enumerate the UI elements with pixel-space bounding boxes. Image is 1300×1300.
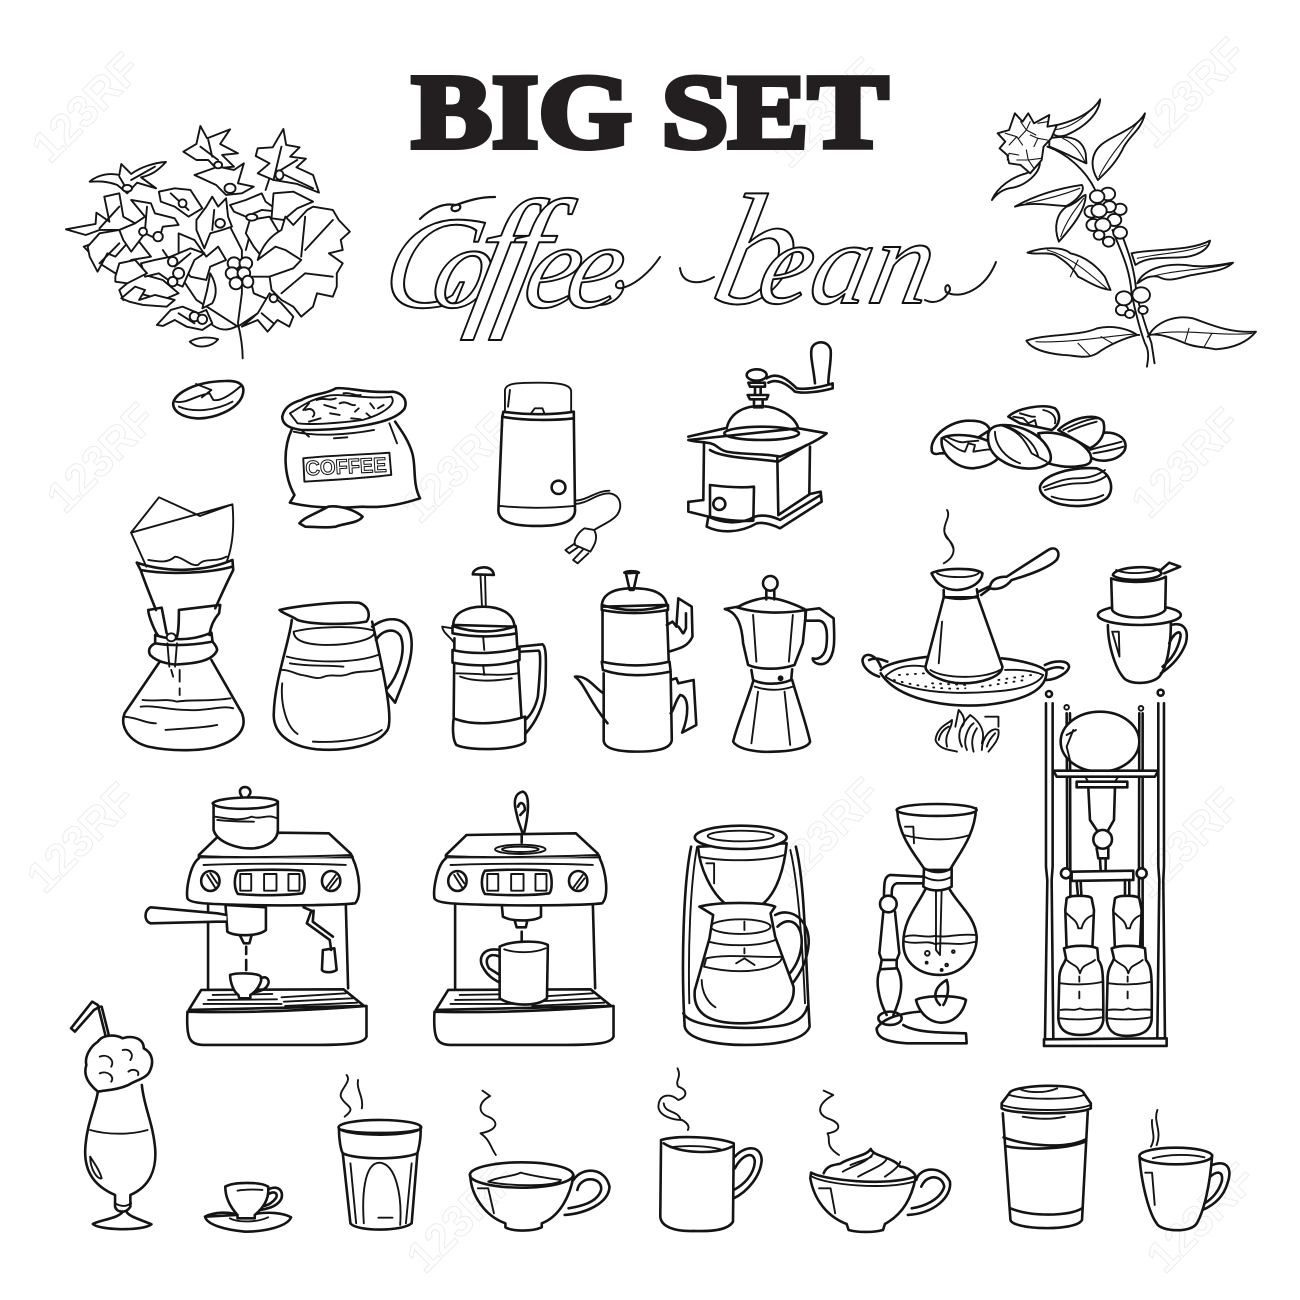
base <box>688 492 822 531</box>
flower cluster <box>998 113 1057 173</box>
dome <box>727 406 798 428</box>
turkish cezve on sand pan <box>862 510 1069 752</box>
flames <box>935 710 999 752</box>
watermarks: 123RF <box>1122 399 1250 527</box>
drawer <box>710 485 754 521</box>
parfait glass <box>71 1002 155 1229</box>
watermarks: 123RF <box>1137 1154 1265 1282</box>
cup with whipped cream <box>810 1091 950 1232</box>
french press <box>442 567 546 749</box>
cezve body <box>925 597 1002 683</box>
script lettering: Coffee: e <box>556 198 639 334</box>
watermarks: 123RF <box>762 49 890 177</box>
watermarks: 123RF <box>22 44 150 172</box>
cold drip tower <box>1044 690 1167 1046</box>
electric grinder <box>498 383 620 563</box>
script lettering: Coffee <box>371 169 660 341</box>
script lettering: Coffee: C <box>372 189 493 336</box>
script lettering: bean: b <box>701 163 817 338</box>
manual grinder <box>688 342 833 531</box>
tower poles <box>1045 703 1165 1040</box>
coffee branch <box>992 99 1256 367</box>
moka pot <box>725 576 834 752</box>
spilled grounds <box>299 506 363 527</box>
glass globe <box>1061 712 1139 772</box>
takeaway cup <box>1002 1086 1091 1228</box>
script lettering: Coffee: o <box>423 202 509 333</box>
body <box>703 443 810 515</box>
group head and portafilter <box>226 905 266 935</box>
stems <box>1047 147 1158 367</box>
title: BIG SET <box>412 53 888 170</box>
top plate <box>688 428 827 457</box>
script lettering: bean: a <box>801 198 887 329</box>
watermarks: 123RF <box>762 769 890 897</box>
script lettering: bean: e <box>749 198 829 329</box>
small mug with steam <box>1139 1110 1229 1230</box>
brew head <box>502 907 541 927</box>
cezve handle <box>979 548 1058 595</box>
power cord and plug <box>575 491 620 530</box>
watermarks: 123RF <box>1122 779 1250 907</box>
mug <box>481 949 500 983</box>
single bean <box>173 381 243 418</box>
tower base <box>1044 1038 1167 1046</box>
siphon brewer <box>877 804 977 1043</box>
watermarks: 123RF <box>37 394 165 522</box>
watermarks: 123RF <box>17 774 145 902</box>
pan handles <box>862 655 1069 680</box>
stacked neapolitan pot <box>575 571 696 752</box>
plate and valve <box>1053 771 1158 777</box>
chemex with filter <box>123 497 244 750</box>
coffee bush <box>66 126 350 358</box>
steam wand <box>304 907 337 972</box>
leaves <box>1049 99 1100 136</box>
drip coffee maker <box>683 826 810 1045</box>
coffee sack <box>282 388 420 527</box>
crank handle <box>811 342 831 383</box>
phin drip cup <box>1098 563 1187 683</box>
left drip vessels <box>1065 896 1094 950</box>
steam <box>944 510 954 563</box>
mug with steam <box>658 1068 762 1231</box>
script lettering: bean <box>680 163 996 338</box>
bean pile <box>932 406 1127 506</box>
espresso cup <box>230 973 261 998</box>
script lettering: Coffee: e <box>514 198 597 334</box>
script lettering: Coffee: f <box>459 169 557 341</box>
sack label <box>303 453 391 482</box>
right drip vessels <box>1113 896 1142 950</box>
pan <box>881 657 1047 706</box>
faucet <box>515 792 528 843</box>
espresso machine one <box>145 787 366 1045</box>
espresso cup with saucer <box>205 1183 291 1232</box>
watermarks: 123RF <box>1127 29 1255 157</box>
faceted glass with steam <box>339 1075 421 1230</box>
espresso machine two <box>434 792 614 1045</box>
script lettering: Coffee: f <box>487 169 585 341</box>
berries <box>1085 188 1150 318</box>
sack text: COFFEE <box>305 453 387 480</box>
script lettering: bean: n <box>859 194 949 330</box>
bean hopper <box>240 787 250 798</box>
glass jug <box>274 602 412 750</box>
wide cup with foam <box>470 1091 610 1231</box>
watermarks: 123RF <box>392 404 520 532</box>
watermarks: 123RF <box>397 1154 525 1282</box>
